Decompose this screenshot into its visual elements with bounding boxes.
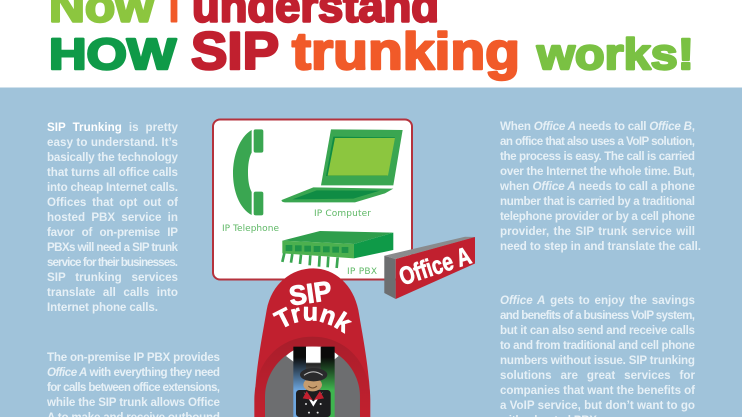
label: IP PBX: IP PBX (347, 267, 377, 277)
SIP trunk tunnel (254, 268, 370, 417)
icon: IP telephone (233, 129, 263, 215)
text block: benefits: a VoIP service, but don’t want to go (500, 399, 695, 412)
text block: benefits: and benefits of a business VoIP system, (500, 309, 695, 322)
text block: intro: PBXs will need a SIP trunk (47, 241, 179, 254)
text block: intro: easy to understand. It’s (47, 136, 178, 149)
tunnel hood (255, 268, 370, 417)
text block: intro: Offices that opt out of (47, 196, 178, 209)
text block: intro: basically the technology (47, 151, 179, 164)
sign: Office A: Office A (396, 242, 475, 291)
text block: on-premise IP PBX: Office A with everything they need (47, 366, 220, 379)
operator figure (296, 368, 331, 417)
text block: intro: that turns all office calls (47, 166, 178, 179)
text block: benefits (499, 294, 696, 417)
text block: calling Office B: over the Internet the whole time. But, (500, 165, 695, 178)
icon: IP computer laptop (282, 129, 403, 202)
text block: benefits: Office A gets to enjoy the savings (500, 294, 695, 307)
text block: calling Office B: the process is easy. The call is carried (500, 150, 695, 163)
text block: on-premise IP PBX (46, 351, 221, 417)
text block: intro: Internet phone calls. (47, 301, 158, 314)
text block: calling Office B: provider, the SIP trunk service will (500, 225, 695, 238)
tunnel interior (265, 347, 360, 417)
text block: intro: hosted PBX service in (47, 211, 178, 224)
title (49, 0, 694, 81)
text block: intro: service for their businesses. (47, 256, 178, 269)
text block: benefits: to and from traditional and cell phone (500, 339, 696, 352)
text block: benefits: companies that want the benefits of (500, 384, 695, 397)
text block: on-premise IP PBX: The on-premise IP PBX provides (47, 351, 220, 364)
text block: intro: into cheap Internet calls. (47, 181, 178, 194)
panel: office equipment (213, 120, 412, 280)
text block: calling Office B: need to step in and translate the call. (500, 240, 701, 253)
text block: on-premise IP PBX: while the SIP trunk allows Office (46, 396, 221, 409)
title: works! (536, 30, 694, 79)
label: SIP: SIP (287, 275, 334, 311)
text block: intro (47, 121, 179, 314)
sign: Office A (384, 237, 475, 299)
text block: benefits: solutions are great services for (500, 369, 695, 382)
icon: IP PBX (282, 231, 393, 268)
text block: intro: SIP Trunking is pretty (47, 121, 179, 134)
text block: on-premise IP PBX: for calls between office extensions, (47, 381, 220, 394)
text block: intro: SIP trunking services (47, 271, 178, 284)
text block: calling Office B: telephone provider or by a cell phone (500, 210, 696, 223)
text block: calling Office B: an office that also uses a VoIP solution, (500, 135, 695, 148)
text block: benefits: numbers without issue. SIP trunking (500, 354, 695, 367)
text block: calling Office B: number that is carried by a traditional (500, 195, 695, 208)
text block: calling Office B: When Office A needs to call Office B, (500, 120, 695, 133)
tunnel ring (254, 337, 370, 417)
text block: intro: translate all calls into (47, 286, 178, 299)
text block: calling Office B: when Office A needs to call a phone (499, 180, 696, 193)
title: SIP (191, 22, 279, 81)
text block: calling Office B (499, 120, 701, 253)
label: Trunk: Trunk (272, 306, 352, 334)
label: IP Telephone: IP Telephone (222, 224, 279, 234)
label: IP Computer: IP Computer (314, 209, 371, 219)
title: HOW (49, 30, 177, 79)
title: trunking (292, 23, 520, 81)
text block: intro: favor of on-premise IP (47, 226, 178, 239)
text block: benefits: but it can also send and receive calls (500, 324, 695, 337)
